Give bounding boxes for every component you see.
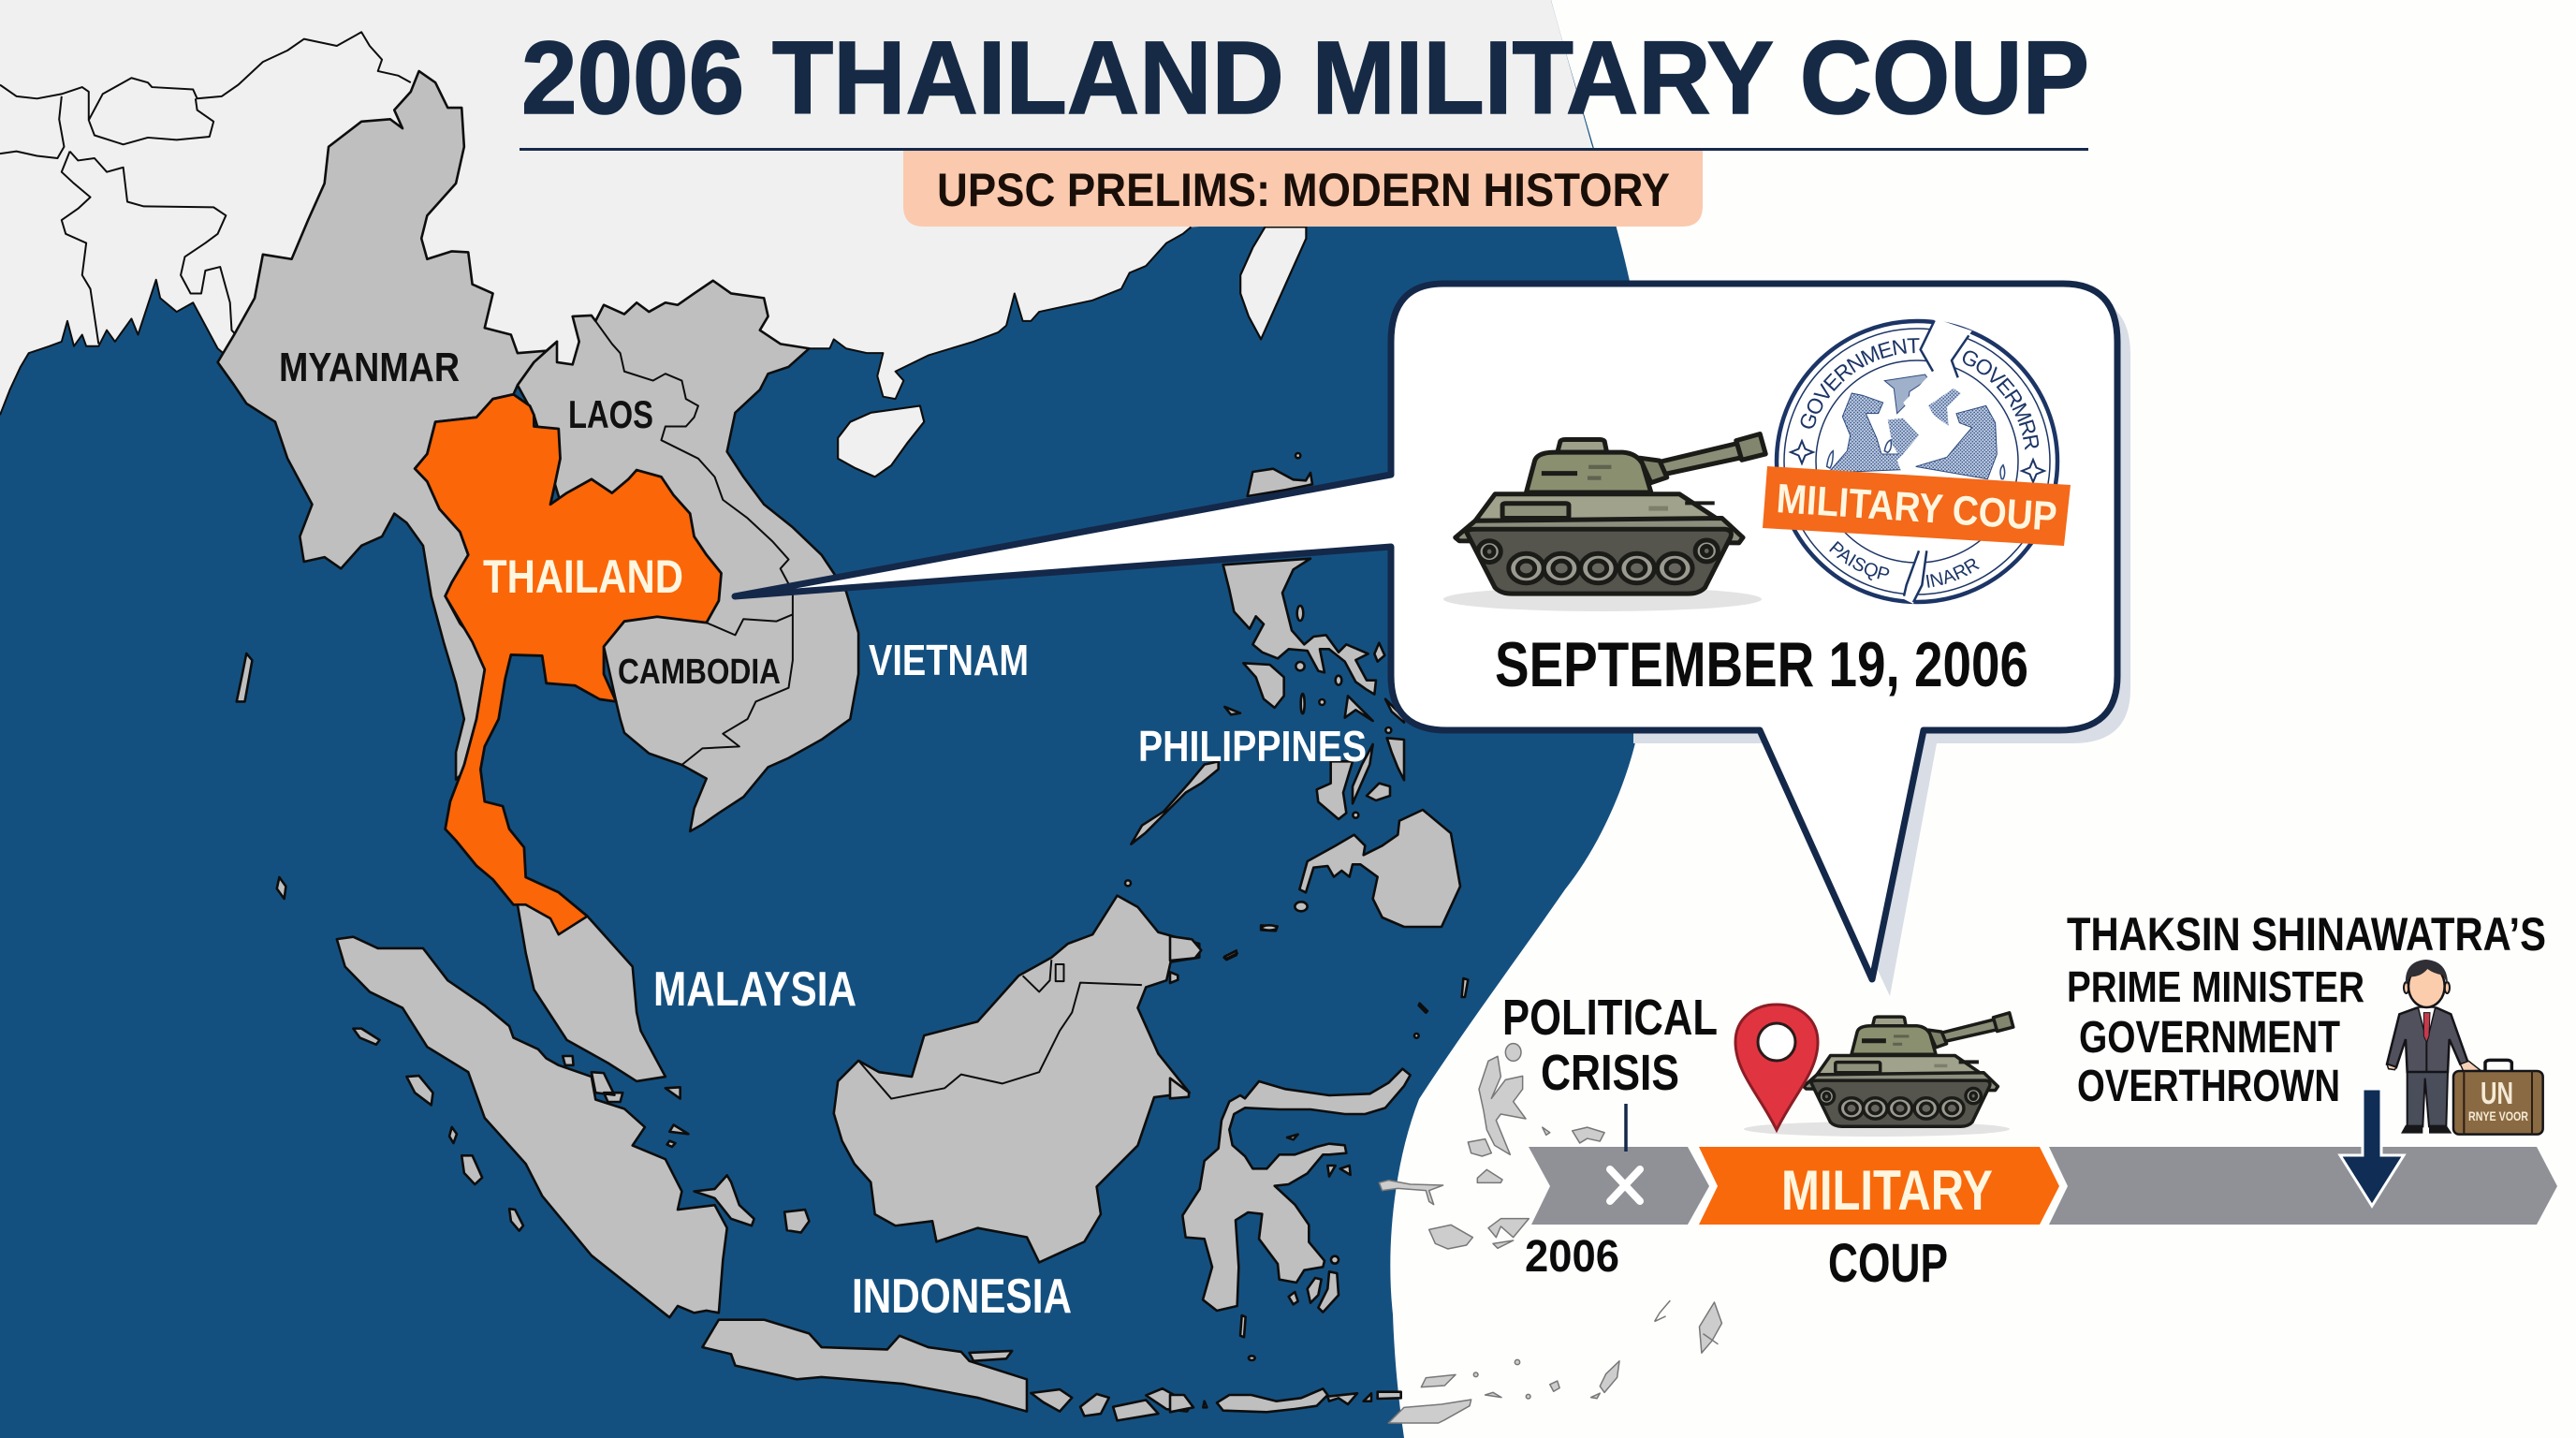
land: Myanmar	[218, 71, 557, 780]
islands: outside map edge	[1379, 1056, 1529, 1423]
tiny islets	[1203, 1034, 1419, 1407]
land: small islands	[277, 877, 1278, 1420]
person: hands	[2387, 1061, 2481, 1071]
label: Laos: LAOS	[568, 392, 653, 436]
person: head and hair	[2404, 982, 2408, 993]
island: Luzon	[1223, 559, 1376, 695]
label: political crisis: POLITICAL	[1502, 990, 1718, 1046]
island: Palawan	[1131, 761, 1219, 844]
island: Sulawesi	[1182, 1069, 1411, 1311]
suitcase	[2485, 1060, 2511, 1072]
land: Hainan	[838, 405, 924, 477]
label: Thaksin overthrow: OVERTHROWN	[2077, 1062, 2340, 1111]
land: Java	[702, 1320, 1027, 1412]
subtitle pill	[903, 149, 1703, 227]
icon: X marker	[1610, 1169, 1640, 1201]
island: Mindoro	[1243, 663, 1284, 708]
map labels	[279, 345, 1367, 1324]
small islets	[1125, 453, 1391, 931]
label: Indonesia: INDONESIA	[852, 1269, 1072, 1324]
icon: down arrow	[2340, 1089, 2404, 1206]
seal text: GOVERNMENT	[1801, 338, 1919, 429]
border: Borneo	[858, 960, 1142, 1099]
sea area	[0, 0, 1638, 1438]
label: Thailand: THAILAND	[483, 550, 683, 603]
label: political crisis: CRISIS	[1541, 1045, 1679, 1101]
seal text: PAISQP	[1829, 541, 1889, 580]
label: Vietnam: VIETNAM	[869, 636, 1029, 684]
borders: Laos, Vietnam, Cambodia	[592, 315, 793, 765]
suitcase label: small print: RNYE VOOR	[2468, 1108, 2528, 1123]
coastline: south China	[809, 227, 1192, 399]
tick line	[1624, 1104, 1628, 1152]
land: Thailand highlighted	[415, 394, 722, 934]
land: Taiwan	[1240, 227, 1306, 339]
icon: location pin	[1735, 1005, 1818, 1130]
coastline: Bay of Bengal	[0, 280, 226, 415]
label: Myanmar: MYANMAR	[279, 345, 460, 390]
banner text: MILITARY COUP	[1775, 476, 2058, 540]
label: Thaksin overthrow	[2067, 908, 2546, 1111]
island: Luzon north	[1248, 469, 1312, 496]
label: Philippines: PHILIPPINES	[1138, 722, 1367, 770]
person: jacket	[2387, 1008, 2468, 1072]
date text: SEPTEMBER 19, 2006	[1495, 629, 2028, 700]
panel: timeline	[1502, 908, 2557, 1294]
land: Sulawesi and Lesser Sunda islands	[1170, 936, 1530, 1423]
label: coup: COUP	[1828, 1233, 1948, 1294]
icon: ousted prime minister with suitcase	[2387, 960, 2543, 1135]
panel: map of Southeast Asia	[0, 0, 1721, 1438]
timeline segment: military coup	[1699, 1147, 2059, 1225]
icon: cracked government seal	[1775, 318, 2059, 605]
label: Cambodia: CAMBODIA	[618, 653, 781, 692]
seal text	[1801, 338, 2039, 588]
seal artwork: lions	[1827, 318, 2005, 604]
land: Malay Peninsula	[518, 904, 666, 1081]
suitcase label: UN: UN	[2481, 1076, 2513, 1110]
icon: large tank	[1443, 433, 1765, 611]
icon: small tank	[1744, 1013, 2013, 1137]
callout: coup date panel with pointers	[732, 281, 2130, 996]
land: Sumatra	[337, 937, 727, 1317]
label: military: MILITARY	[1781, 1159, 1993, 1222]
timeline segment: overthrow	[2049, 1147, 2557, 1225]
seal text: GOVERMRR	[1962, 350, 2039, 450]
islands: lower right beyond map edge	[1543, 1127, 1721, 1399]
land: Andaman islands	[237, 653, 252, 701]
label: Malaysia: MALAYSIA	[653, 962, 856, 1017]
land: Philippines	[1125, 453, 1460, 931]
subtitle text: UPSC PRELIMS: MODERN HISTORY	[937, 164, 1670, 216]
banner: military coup stamp	[1763, 466, 2071, 546]
land: Laos, Vietnam, Cambodia	[518, 281, 858, 831]
borders: northern neighbours	[0, 32, 411, 344]
label: Thaksin overthrow: PRIME MINISTER	[2067, 962, 2364, 1011]
label: political crisis	[1502, 990, 1718, 1101]
land: China and northern region	[0, 0, 1617, 415]
label: Thaksin overthrow: GOVERNMENT	[2079, 1013, 2340, 1063]
seal text: INARR	[1926, 558, 1980, 588]
islands: Lesser Sunda	[1170, 1388, 1401, 1412]
land: Borneo	[834, 896, 1199, 1262]
islands: around Sulawesi	[1170, 936, 1468, 1337]
person: legs and shoes	[2408, 1072, 2448, 1126]
title: 2006 THAILAND MILITARY COUP	[521, 21, 2089, 136]
map land shapes	[0, 0, 1617, 1420]
timeline segment: 2006	[1529, 1147, 1709, 1225]
islands: Visayas	[1224, 643, 1404, 819]
group: southern map	[277, 877, 1278, 1420]
island: Mindanao	[1299, 810, 1460, 927]
label: 2006: 2006	[1525, 1232, 1619, 1282]
